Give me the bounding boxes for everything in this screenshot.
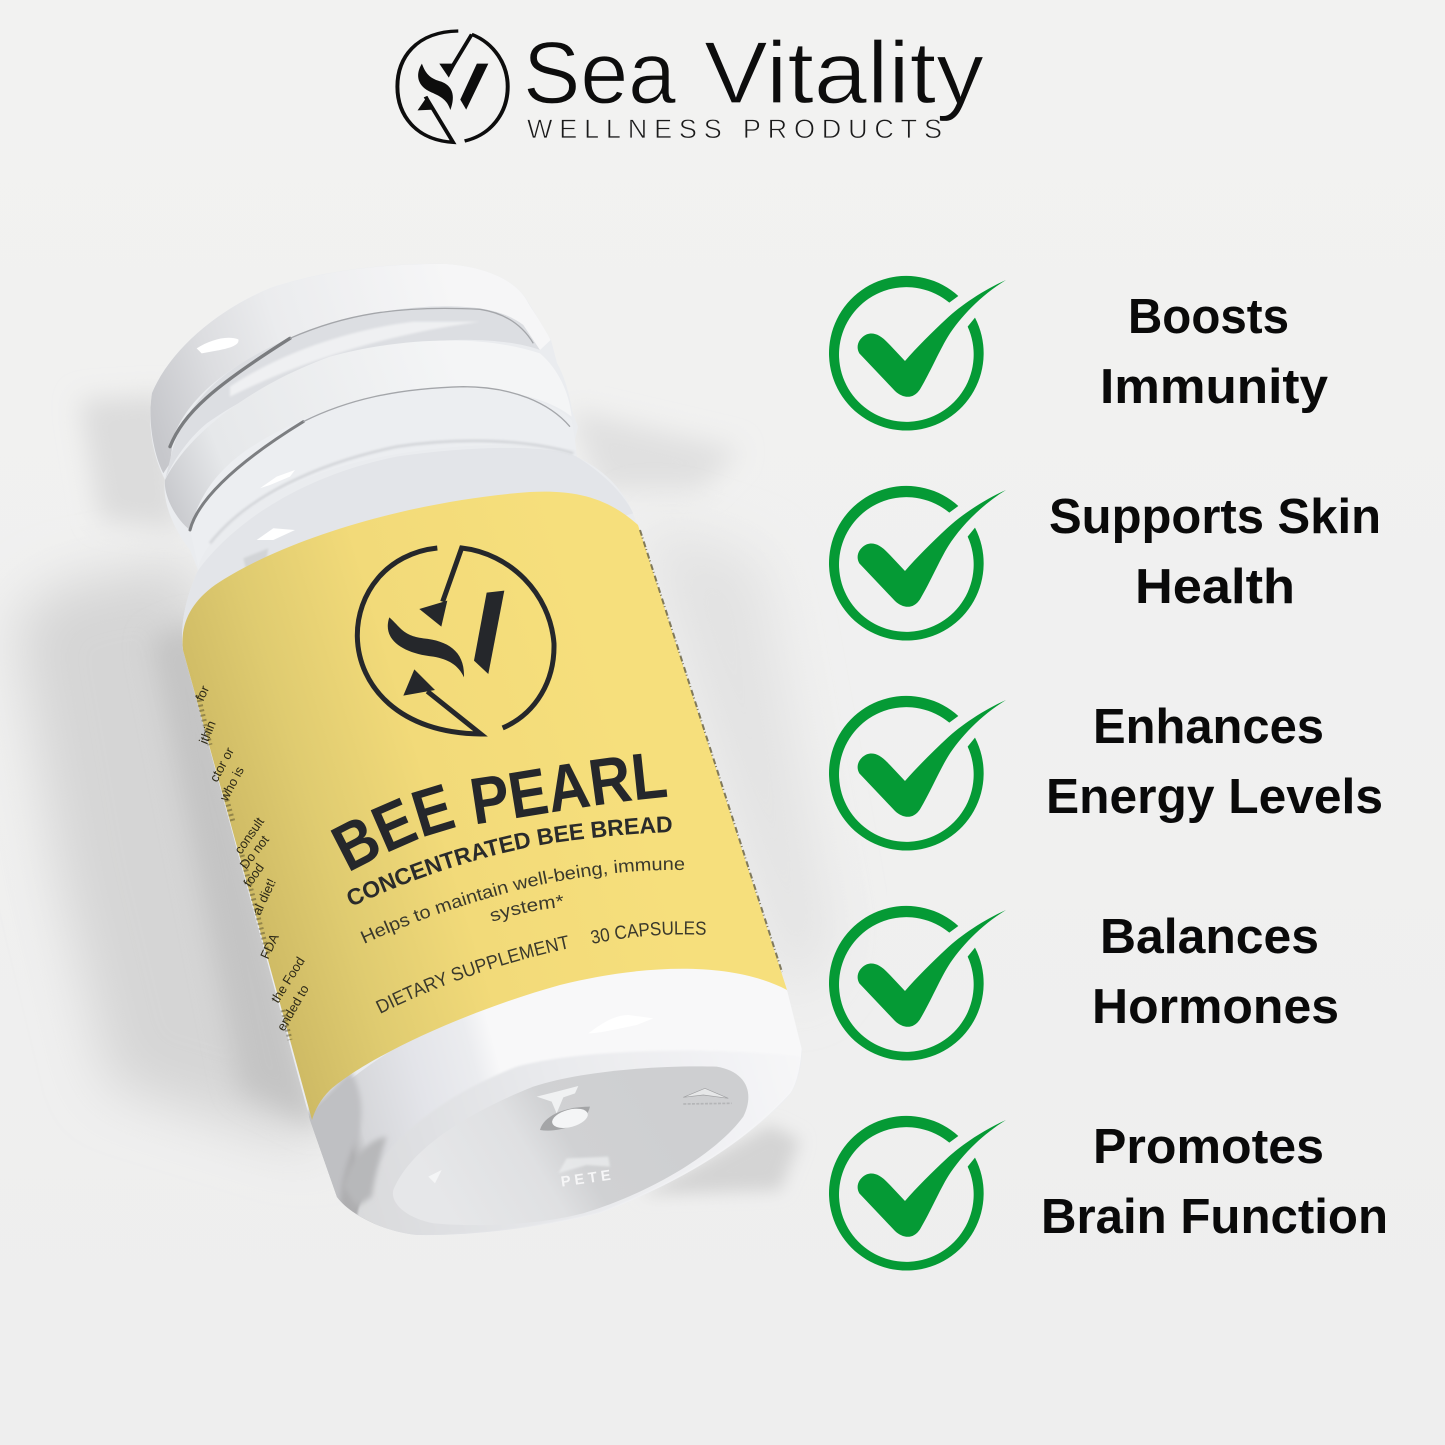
icon: green check bbox=[829, 906, 1006, 1061]
shoulder crease bbox=[210, 441, 573, 543]
shoulder bbox=[182, 448, 633, 650]
side fine print: ended to bbox=[274, 982, 312, 1034]
side fine print: for bbox=[192, 683, 212, 703]
text: Hormones bbox=[1092, 980, 1339, 1034]
text: Brain Function bbox=[1041, 1190, 1388, 1244]
side fine print: consult bbox=[231, 814, 267, 857]
side fine print: al diet! bbox=[249, 876, 279, 917]
dietary supplement: DIETARY SUPPLEMENT bbox=[376, 935, 568, 1014]
side fine print: FDA bbox=[257, 931, 282, 961]
text: Health bbox=[1135, 560, 1295, 614]
wordmark: Sea: Sea bbox=[523, 23, 676, 122]
shoulder reflection bbox=[244, 549, 268, 567]
neck band bbox=[165, 306, 540, 480]
benefit: Boosts Immunity bbox=[829, 276, 1328, 431]
benefit: Enhances Energy Levels bbox=[829, 696, 1383, 851]
benefit: Supports Skin Health bbox=[829, 486, 1381, 641]
cap and neck bbox=[150, 264, 574, 568]
tagline: WELLNESS PRODUCTS bbox=[527, 114, 942, 144]
lower groove fine bbox=[303, 387, 570, 427]
benefit: Promotes Brain Function bbox=[829, 1116, 1388, 1271]
label claim line 1: Helps to maintain well-being, immune bbox=[360, 860, 684, 944]
lower body bbox=[300, 963, 802, 1235]
text: Enhances bbox=[1093, 700, 1324, 754]
text: Balances bbox=[1100, 910, 1319, 964]
body glare bbox=[588, 1015, 653, 1033]
text: Boosts bbox=[1128, 290, 1289, 344]
lower neck bbox=[190, 388, 577, 567]
text: Energy Levels bbox=[1046, 770, 1383, 824]
upper groove fine bbox=[290, 308, 533, 343]
side fine print: food bbox=[240, 860, 267, 890]
BEE PEARL: BEE PEARL bbox=[330, 754, 668, 871]
label claim line 2: system* bbox=[490, 895, 563, 922]
wordmark: Vitality: Vitality bbox=[704, 23, 984, 122]
second ring bbox=[165, 340, 572, 530]
concentrated bee bread: CONCENTRATED BEE BREAD bbox=[348, 816, 672, 904]
logo mark bbox=[397, 31, 508, 142]
icon: green check bbox=[829, 486, 1006, 641]
bottle shading clipped bbox=[150, 264, 802, 1235]
product bottle bbox=[150, 295, 802, 1235]
side fine print: Do not bbox=[237, 832, 272, 872]
PETE mark: PETE bbox=[560, 1168, 612, 1191]
base pin bbox=[537, 1086, 590, 1131]
bottle silhouette bbox=[150, 264, 802, 1235]
logo: Sea Vitality bbox=[397, 23, 984, 144]
base arrow mark bbox=[683, 1088, 732, 1104]
neck band highlight bbox=[230, 322, 480, 397]
base bbox=[393, 1066, 748, 1225]
side fine print: ctor or bbox=[206, 744, 237, 784]
side fine print: who is bbox=[216, 763, 247, 804]
cap glare bbox=[197, 338, 239, 353]
upper groove dark bbox=[170, 338, 290, 447]
label left edge fine print bbox=[198, 695, 290, 1040]
bottle shadow bbox=[15, 395, 830, 1195]
capsule count: 30 CAPSULES bbox=[590, 921, 706, 944]
text: Immunity bbox=[1100, 360, 1328, 414]
label edge fine print bbox=[640, 530, 782, 972]
lower groove dark bbox=[190, 422, 303, 530]
neck glare bbox=[257, 470, 295, 540]
cap top bbox=[150, 264, 551, 473]
base rim smudge bbox=[343, 1137, 387, 1207]
text: Promotes bbox=[1093, 1120, 1324, 1174]
small base mark bbox=[428, 1170, 442, 1183]
icon: green check bbox=[829, 276, 1006, 431]
recycle mark top bbox=[558, 1157, 610, 1173]
side fine print: the Food bbox=[268, 954, 308, 1006]
benefit: Balances Hormones bbox=[829, 906, 1339, 1061]
rim bbox=[356, 1052, 712, 1228]
yellow label bbox=[182, 492, 787, 1120]
side fine print: ithin bbox=[196, 718, 219, 746]
icon: green check bbox=[829, 696, 1006, 851]
text: Supports Skin bbox=[1049, 490, 1381, 544]
body base section bbox=[300, 963, 802, 1235]
icon: green check bbox=[829, 1116, 1006, 1271]
side fine print bbox=[192, 683, 312, 1034]
label logo bbox=[357, 548, 554, 734]
body left corner bbox=[308, 1072, 362, 1200]
